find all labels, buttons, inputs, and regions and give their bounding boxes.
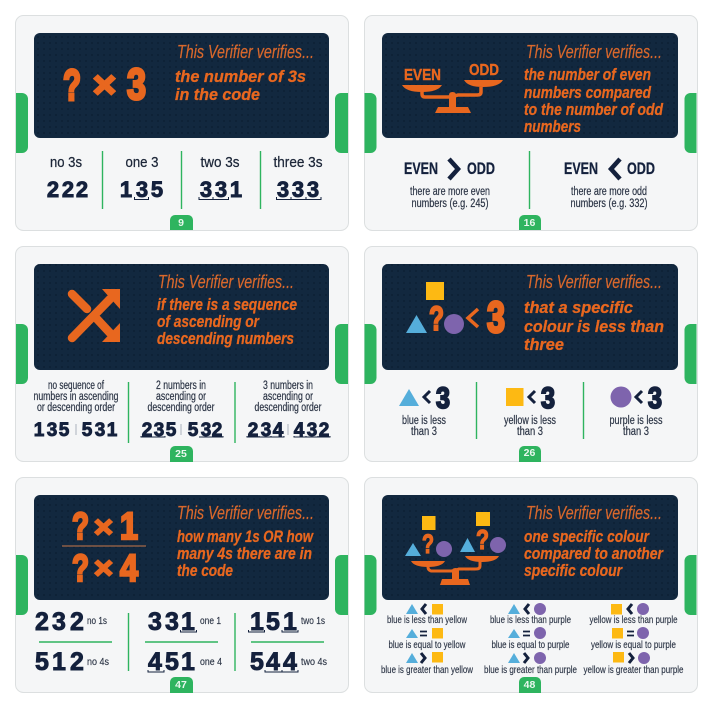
- icon: colour shapes less than three: ?: [429, 300, 444, 338]
- column: no sequence: or descending order: [37, 402, 115, 414]
- panel: verifier card 47: [16, 478, 348, 693]
- column: yellow versus purple: yellow is less than purple: [590, 614, 678, 626]
- dark header panel: [382, 33, 678, 138]
- heading: This Verifier verifies...: [526, 42, 662, 62]
- right green tab: [684, 324, 696, 384]
- right green tab: [684, 555, 696, 615]
- column: blue less than 3: blue is less: [402, 415, 446, 427]
- column: three 3s: three 3s: [274, 155, 322, 171]
- column: two 1s two 4s: 151: [250, 608, 297, 636]
- icon: shuffle arrows: [72, 289, 120, 342]
- column: no 3s: 222: [47, 177, 88, 202]
- column: one 3: [120, 155, 163, 202]
- column: no 1s no 4s: no 4s: [87, 656, 109, 668]
- left green tab: [16, 555, 28, 615]
- dark header panel: [34, 495, 329, 600]
- column: yellow versus purple: yellow is equal to purple: [591, 639, 676, 651]
- dark header panel: [382, 264, 678, 370]
- column: purple less than 3: purple is less: [610, 415, 663, 427]
- column: one 1 one 4: 451: [148, 648, 195, 676]
- column: blue versus yellow: blue is greater than yellow: [381, 664, 473, 676]
- column: three numbers: 3 numbers in: [263, 380, 313, 392]
- icon: colour comparison scale: ?: [476, 524, 489, 555]
- column: no 1s no 4s: [35, 608, 109, 676]
- column: two 3s: two 3s: [200, 155, 240, 171]
- description: [157, 295, 297, 348]
- icon: question times three: [63, 60, 146, 110]
- column: blue less than 3: [399, 382, 450, 438]
- panel: verifier card 9: [16, 16, 348, 230]
- column: two numbers: 2 numbers in: [156, 380, 206, 392]
- description: the number of even: [524, 65, 651, 84]
- description: that a specific: [524, 298, 634, 317]
- description: if there is a sequence: [157, 295, 297, 314]
- right green tab: [335, 555, 348, 615]
- icon: question times three: ?: [63, 61, 81, 110]
- icon: question times one over question times four: ×: [94, 552, 113, 585]
- description: to the number of odd: [524, 100, 663, 119]
- card number tab: [170, 446, 193, 462]
- left green tab: [16, 324, 28, 384]
- column: blue versus purple: [484, 603, 577, 676]
- column: no 3s: no 3s: [50, 155, 82, 171]
- column: no sequence: 531: [82, 420, 118, 441]
- column: no sequence: no sequence of: [48, 380, 105, 392]
- column: even greater than odd: [404, 159, 495, 210]
- column: no sequence: [34, 380, 118, 441]
- column: blue versus purple: blue is greater than purple: [484, 664, 577, 676]
- dark header panel: [382, 495, 678, 600]
- column: blue versus yellow: blue is equal to yellow: [388, 639, 466, 651]
- card number tab: [519, 677, 541, 693]
- card number tab: [519, 215, 541, 230]
- heading: This Verifier verifies...: [158, 272, 294, 292]
- description: [524, 298, 664, 354]
- icon: question times one over question times four: 1: [120, 506, 138, 548]
- column: one 1 one 4: one 1: [200, 615, 221, 627]
- column: even less than odd: ODD: [627, 159, 655, 178]
- icon: question times one over question times four: ?: [72, 506, 89, 548]
- card number tab: [519, 446, 541, 462]
- icon: even odd scale: [402, 62, 503, 113]
- column: two numbers: 235: [142, 420, 177, 441]
- card number tab: 48: [524, 679, 535, 691]
- column: two 1s two 4s: two 1s: [301, 615, 325, 627]
- description: specific colour: [524, 561, 623, 580]
- column: even less than odd: EVEN: [564, 159, 598, 178]
- column: even less than odd: there are more odd: [571, 186, 647, 198]
- column: blue versus yellow: [381, 604, 473, 676]
- description: the code: [177, 561, 233, 580]
- column: purple less than 3: than 3: [623, 426, 649, 438]
- card number tab: 47: [175, 679, 187, 691]
- description: one specific colour: [524, 527, 650, 546]
- column: yellow less than 3: [504, 382, 556, 438]
- left green tab: [364, 93, 376, 153]
- column: no 3s: [47, 155, 88, 202]
- panel: verifier card 25: [16, 246, 348, 462]
- column: three numbers: [247, 380, 330, 441]
- column: purple less than 3: [610, 382, 663, 438]
- column: two numbers: [141, 380, 223, 441]
- column: two 3s: [199, 155, 242, 202]
- description: three: [524, 335, 564, 354]
- column: no 1s no 4s: 232: [35, 608, 84, 636]
- icon: colour shapes less than three: 3: [487, 293, 505, 342]
- column: three numbers: 234: [248, 420, 284, 441]
- description: numbers compared: [524, 83, 651, 102]
- heading: This Verifier verifies...: [526, 272, 662, 292]
- description: many 4s there are in: [177, 544, 312, 563]
- column: even greater than odd: there are more even: [410, 186, 490, 198]
- column: yellow less than 3: yellow is less: [504, 415, 556, 427]
- card number tab: 25: [175, 448, 187, 460]
- icon: question times three: 3: [127, 60, 146, 109]
- left green tab: [364, 324, 376, 384]
- card number tab: 26: [524, 447, 535, 459]
- right green tab: [335, 93, 348, 153]
- dark header panel: [34, 264, 329, 370]
- icon: colour comparison scale: [405, 512, 506, 585]
- column: even greater than odd: numbers (e.g. 245): [412, 198, 489, 210]
- column: no sequence: 135: [34, 420, 70, 441]
- column: one 3: 135: [120, 177, 163, 202]
- column: no 1s no 4s: 512: [35, 648, 84, 676]
- right green tab: [684, 93, 696, 153]
- icon: question times one over question times four: ?: [72, 548, 89, 590]
- column: three numbers: 432: [294, 420, 329, 441]
- description: the number of 3s: [175, 67, 306, 86]
- panel: verifier card 26: [364, 246, 698, 462]
- description: in the code: [175, 85, 260, 104]
- icon: even odd scale: EVEN: [404, 67, 441, 84]
- column: even less than odd: [564, 159, 655, 210]
- column: one 3: one 3: [126, 155, 158, 171]
- column: blue versus yellow: blue is less than yellow: [387, 614, 467, 626]
- description: [175, 67, 306, 104]
- column: three 3s: [274, 155, 322, 202]
- card number tab: [170, 215, 193, 230]
- heading: This Verifier verifies...: [526, 503, 662, 523]
- heading: This Verifier verifies...: [177, 42, 314, 62]
- column: two 1s two 4s: 544: [250, 648, 297, 676]
- column: even greater than odd: ODD: [467, 159, 495, 178]
- card number tab: [170, 677, 193, 693]
- column: yellow versus purple: yellow is greater than purple: [584, 664, 684, 676]
- right green tab: [335, 324, 348, 384]
- left green tab: [364, 555, 376, 615]
- column: yellow less than 3: than 3: [517, 426, 543, 438]
- column: purple less than 3: 3: [648, 382, 662, 415]
- column: three numbers: descending order: [254, 402, 322, 414]
- description: [524, 527, 664, 580]
- description: descending numbers: [157, 329, 294, 348]
- icon: question times three: ×: [93, 64, 116, 105]
- dark header panel: [34, 33, 329, 138]
- icon: question times one over question times four: ×: [94, 511, 113, 544]
- column: two 1s two 4s: [248, 608, 327, 676]
- panel: verifier card 48: [364, 478, 698, 693]
- card number tab: 9: [178, 217, 184, 229]
- description: compared to another: [524, 544, 664, 563]
- column: blue versus purple: blue is equal to purple: [492, 639, 570, 651]
- column: no sequence: numbers in ascending: [34, 391, 118, 403]
- description: numbers: [524, 117, 581, 136]
- column: two 3s: 331: [200, 177, 242, 202]
- column: two numbers: descending order: [148, 402, 215, 414]
- description: [524, 65, 663, 136]
- column: two numbers: ascending or: [156, 391, 206, 403]
- icon: question times one over question times four: 4: [120, 548, 138, 590]
- column: three 3s: 333: [277, 177, 319, 202]
- icon: even odd scale: ODD: [469, 62, 499, 79]
- column: blue less than 3: than 3: [411, 426, 437, 438]
- column: no 1s no 4s: no 1s: [87, 615, 107, 627]
- description: [177, 527, 314, 580]
- column: one 1 one 4: [148, 608, 222, 676]
- column: blue versus purple: blue is less than purple: [490, 614, 571, 626]
- description: colour is less than: [524, 317, 664, 336]
- icon: question times one over question times four: [62, 506, 146, 590]
- description: of ascending or: [157, 312, 260, 331]
- heading: This Verifier verifies...: [177, 503, 314, 523]
- description: how many 1s OR how: [177, 527, 314, 546]
- column: one 1 one 4: one 4: [200, 656, 222, 668]
- column: blue less than 3: 3: [436, 382, 450, 415]
- icon: colour comparison scale: ?: [422, 529, 434, 559]
- column: two numbers: 532: [188, 420, 222, 441]
- icon: colour shapes less than three: [406, 282, 505, 342]
- column: even greater than odd: EVEN: [404, 159, 438, 178]
- column: one 1 one 4: 331: [148, 608, 195, 636]
- column: three numbers: ascending or: [263, 391, 313, 403]
- column: yellow less than 3: 3: [541, 382, 555, 415]
- left green tab: [16, 93, 28, 153]
- column: even less than odd: numbers (e.g. 332): [570, 198, 648, 210]
- card number tab: 16: [524, 217, 535, 229]
- column: yellow versus purple: [584, 603, 684, 676]
- panel: verifier card 16: [364, 16, 698, 230]
- column: two 1s two 4s: two 4s: [301, 656, 327, 668]
